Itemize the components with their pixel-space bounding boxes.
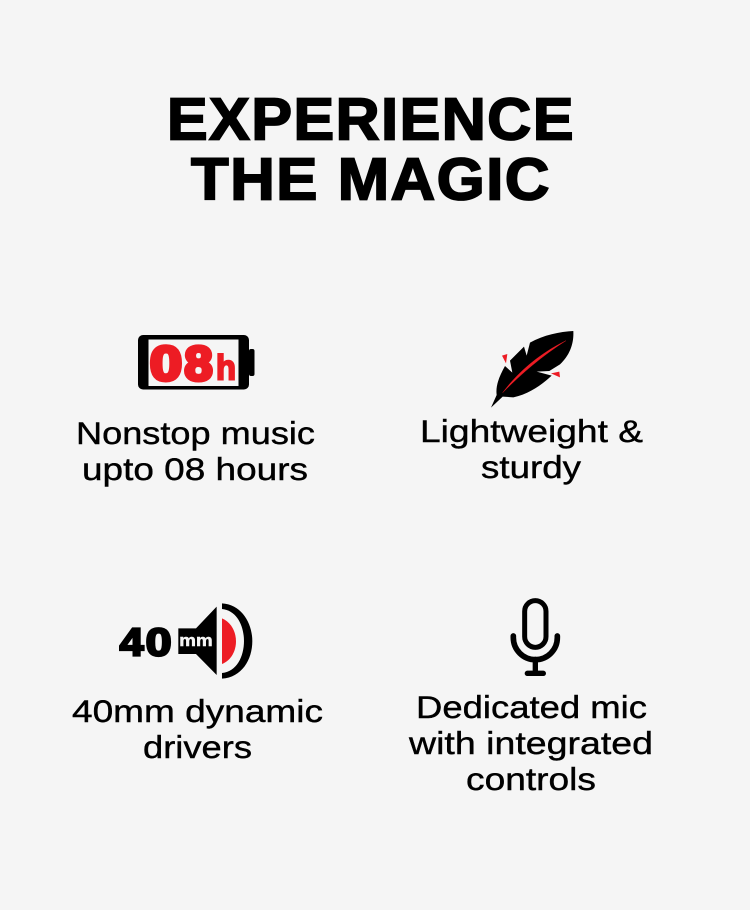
icon: 40mm speaker: mm [179, 631, 213, 650]
text: drivers [72, 693, 323, 765]
text: drivers: drivers [143, 729, 252, 765]
title: EXPERIENCE [167, 86, 575, 152]
text: microphone: Dedicated mic [416, 689, 647, 725]
text: lightweight: sturdy [481, 449, 581, 485]
icon: 40mm speaker: 0 [146, 621, 172, 665]
icon: feather [491, 331, 573, 408]
panel: battery life [76, 335, 315, 487]
panel: microphone [408, 601, 653, 797]
text: microphone: with integrated [408, 725, 653, 761]
text: battery life: upto 08 hours [82, 451, 308, 487]
text: lightweight: Lightweight & [420, 413, 643, 449]
icon: microphone [513, 601, 557, 673]
icon: 40mm speaker: 4 [120, 621, 144, 665]
text: microphone: controls [466, 761, 596, 797]
panel: drivers [72, 603, 323, 765]
icon: battery 08h: 8 [184, 338, 212, 391]
panel: lightweight [420, 331, 643, 485]
icon: battery 08h: 0 [150, 338, 182, 391]
text: microphone [408, 689, 653, 797]
text: battery life [76, 415, 315, 487]
icon: 40mm speaker [120, 603, 252, 679]
icon: battery 08h [138, 335, 254, 391]
icon: battery 08h: h [216, 348, 236, 388]
text: lightweight [420, 413, 643, 485]
text: drivers: 40mm dynamic [72, 693, 323, 729]
text: battery life: Nonstop music [76, 415, 315, 451]
title [167, 86, 575, 212]
title: THE MAGIC [191, 146, 551, 212]
